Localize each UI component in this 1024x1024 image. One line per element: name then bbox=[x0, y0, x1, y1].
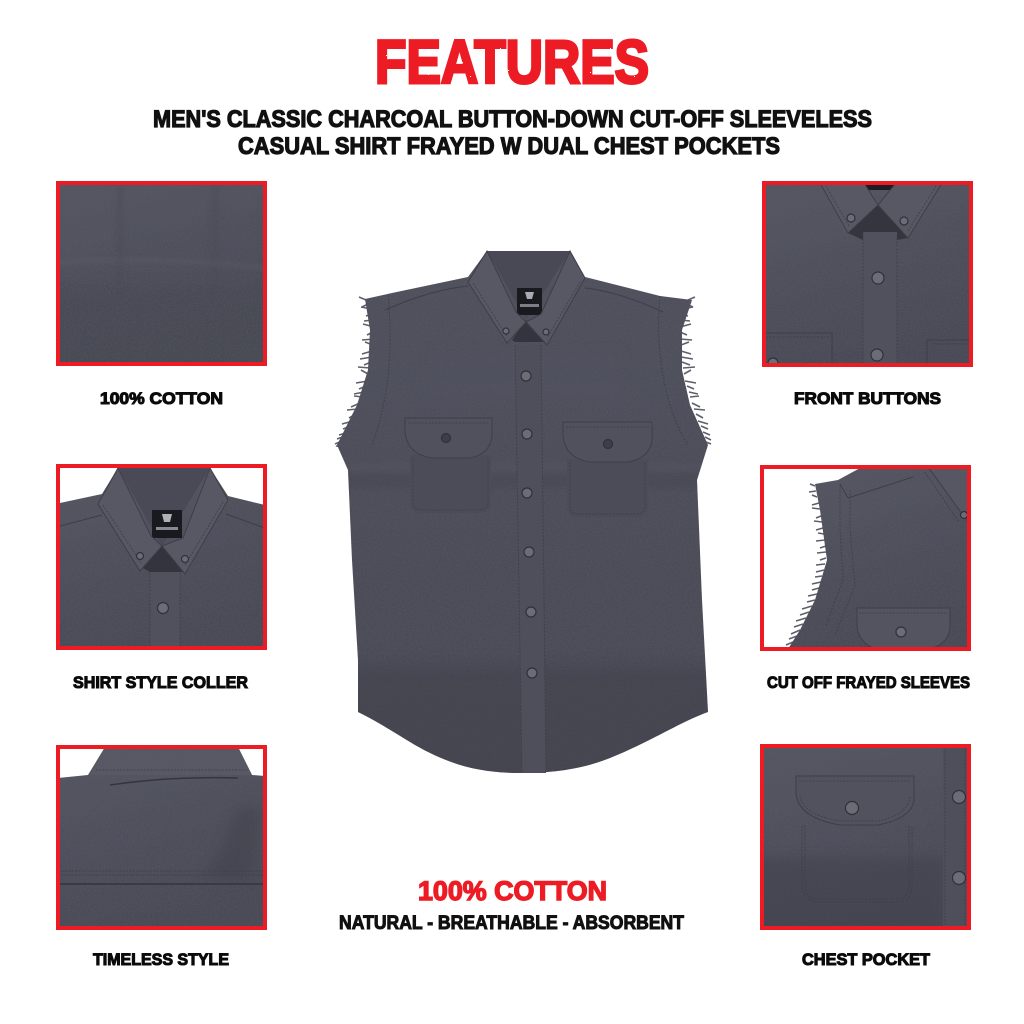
callout: natural breathable absorbent: NATURAL - BREATHABLE - ABSORBENT bbox=[339, 913, 684, 934]
right chest pocket bbox=[563, 422, 652, 517]
buttons bbox=[521, 371, 537, 678]
label: front buttons: FRONT BUTTONS bbox=[794, 389, 941, 408]
subtitle: MEN'S CLASSIC CHARCOAL BUTTON-DOWN CUT-OFF SLEEVELESS bbox=[153, 106, 872, 133]
tag bbox=[152, 510, 182, 538]
collar bbox=[468, 251, 585, 345]
label: shirt style coller: SHIRT STYLE COLLER bbox=[73, 673, 248, 692]
armhole stitching bbox=[372, 295, 688, 445]
center: sleeveless shirt photo bbox=[335, 251, 711, 778]
neck label bbox=[517, 288, 542, 315]
shirt body bbox=[337, 251, 708, 773]
label: 100% cotton: 100% COTTON bbox=[100, 389, 223, 408]
panel: timeless style bbox=[58, 747, 265, 928]
frayed right armhole bbox=[680, 297, 711, 444]
frayed left armhole bbox=[335, 297, 374, 447]
shading folds bbox=[345, 464, 708, 773]
label: cut off frayed sleeves: CUT OFF FRAYED SLEEVES bbox=[767, 673, 970, 692]
placket bbox=[515, 345, 546, 773]
subtitle bbox=[153, 106, 872, 160]
panel: cut off frayed sleeves bbox=[762, 467, 969, 649]
subtitle: CASUAL SHIRT FRAYED W DUAL CHEST POCKETS bbox=[238, 133, 780, 160]
panel: shirt style collar bbox=[58, 466, 265, 648]
label: chest pocket: CHEST POCKET bbox=[802, 950, 931, 969]
title: FEATURES bbox=[375, 28, 649, 96]
panel: chest pocket bbox=[750, 746, 969, 938]
left chest pocket bbox=[405, 418, 492, 513]
callout: 100% cotton: 100% COTTON bbox=[418, 876, 607, 906]
panel: 100% cotton fabric bbox=[56, 181, 267, 366]
label: timeless style: TIMELESS STYLE bbox=[93, 950, 229, 969]
panel: front buttons bbox=[764, 183, 971, 368]
